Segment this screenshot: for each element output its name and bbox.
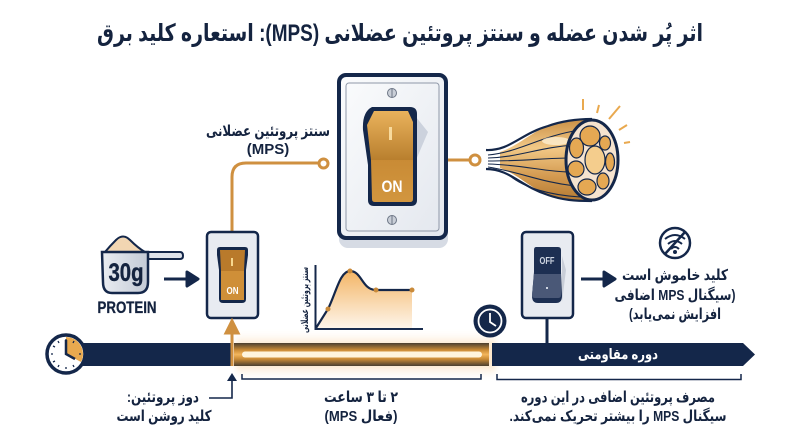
text: active duration: (فعال MPS)	[324, 408, 398, 425]
wire: switch to muscle	[448, 155, 480, 165]
small ON switch	[207, 232, 258, 318]
timeline	[66, 330, 755, 380]
arrow: dose up into switch	[226, 321, 238, 366]
bracket: refractory period	[497, 374, 741, 380]
icon: protein scoop	[98, 236, 183, 317]
label: refractory period: دوره مقاومتی	[578, 347, 658, 363]
text: switch off: افزایش نمی‌یابد)	[629, 306, 721, 323]
arrow: protein to switch	[164, 272, 198, 286]
text: refractory explanation: سیگنال MPS را بیشتر تحریک نمی‌کند.	[510, 407, 726, 425]
large ON switch: ON	[382, 177, 402, 196]
icon: protein scoop: PROTEIN	[98, 298, 156, 317]
text: switch off	[614, 267, 736, 323]
text: switch off: (سیگنال MPS اضافی	[614, 286, 736, 304]
chart: MPS curve	[300, 265, 423, 333]
wire: small switch to MPS label	[232, 159, 328, 233]
bracket: active period	[242, 374, 481, 379]
large ON switch	[339, 75, 448, 248]
icon: timeline clock	[47, 335, 85, 373]
text: active duration: ۲ تا ۳ ساعت	[324, 389, 398, 406]
label: MPS: سنتز پروتئین عضلانی	[206, 123, 330, 141]
small ON switch: ON	[226, 286, 238, 297]
title: اثر پُر شدن عضله و سنتز پروتئین عضلانی (MPS): استعاره کلید برق	[97, 20, 703, 47]
arrow: off switch to text	[581, 272, 615, 286]
text: active duration	[324, 389, 398, 425]
label: MPS	[206, 123, 330, 158]
text: switch off: کلید خاموش است	[622, 267, 728, 284]
chart: MPS curve: سنتز پروتئین عضلانی	[300, 267, 311, 333]
OFF switch	[522, 232, 573, 343]
icon: small clock	[474, 304, 506, 338]
icon: no signal	[660, 228, 690, 258]
text: refractory explanation: مصرف پروتئین اضافی در این دوره	[521, 389, 715, 407]
icon: protein scoop: 30g	[108, 259, 144, 287]
icon: muscle cross-section	[486, 99, 630, 201]
OFF switch: OFF	[540, 256, 554, 267]
label: MPS: (MPS)	[247, 141, 289, 158]
text: protein dose: کلید روشن است	[116, 408, 212, 425]
text: refractory explanation	[510, 389, 726, 425]
arrow: dose callout	[209, 373, 237, 398]
text: protein dose	[116, 389, 212, 425]
text: protein dose: دوز پروتئین:	[127, 389, 199, 407]
